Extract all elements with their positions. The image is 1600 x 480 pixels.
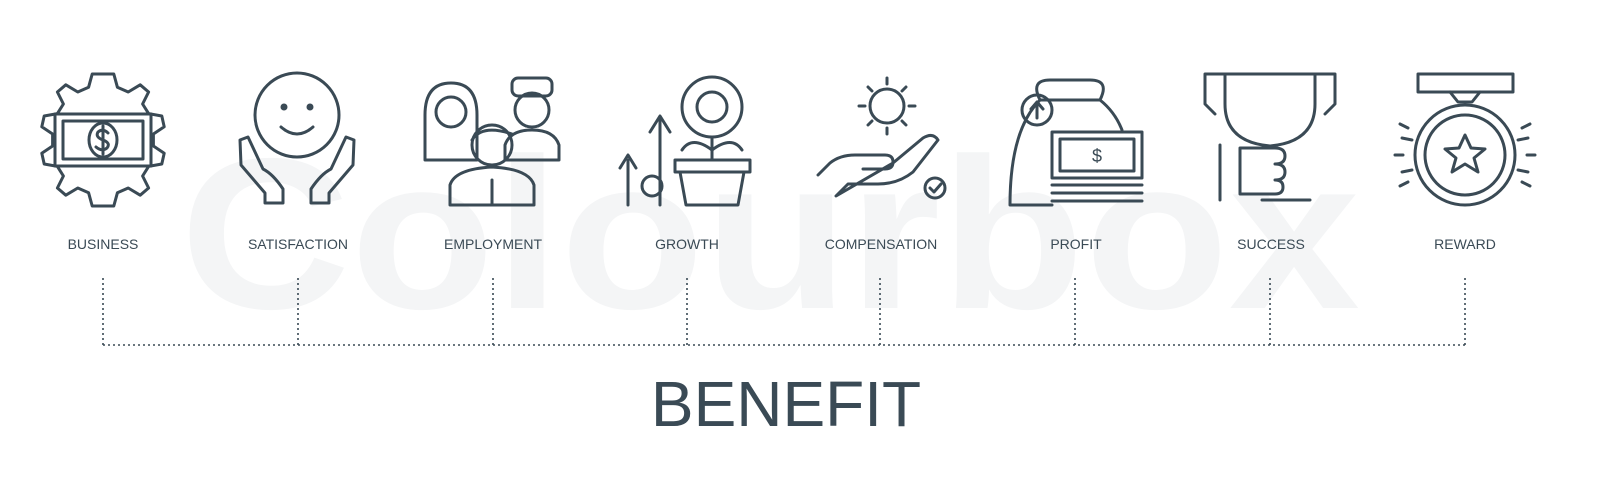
- icon: employment: [425, 78, 559, 205]
- labels: COMPENSATION: [825, 236, 937, 252]
- labels: SUCCESS: [1237, 236, 1305, 252]
- icon: success: [1205, 74, 1335, 200]
- labels: SATISFACTION: [248, 236, 348, 252]
- icon: satisfaction: [240, 73, 354, 203]
- icon: compensation: [818, 78, 945, 198]
- icon: reward: [1395, 74, 1535, 205]
- labels: EMPLOYMENT: [444, 236, 542, 252]
- icon: business: [42, 74, 164, 206]
- icon: profit: [1010, 80, 1142, 205]
- labels: GROWTH: [655, 236, 719, 252]
- labels: REWARD: [1434, 236, 1496, 252]
- watermark: Colourbox: [180, 113, 1360, 354]
- connector lines: [103, 278, 1465, 345]
- icon: profit: $: [1092, 146, 1102, 166]
- title: BENEFIT: [651, 368, 921, 440]
- labels: PROFIT: [1050, 236, 1102, 252]
- icon: growth: [620, 77, 750, 205]
- labels: [68, 236, 1496, 252]
- labels: BUSINESS: [68, 236, 138, 252]
